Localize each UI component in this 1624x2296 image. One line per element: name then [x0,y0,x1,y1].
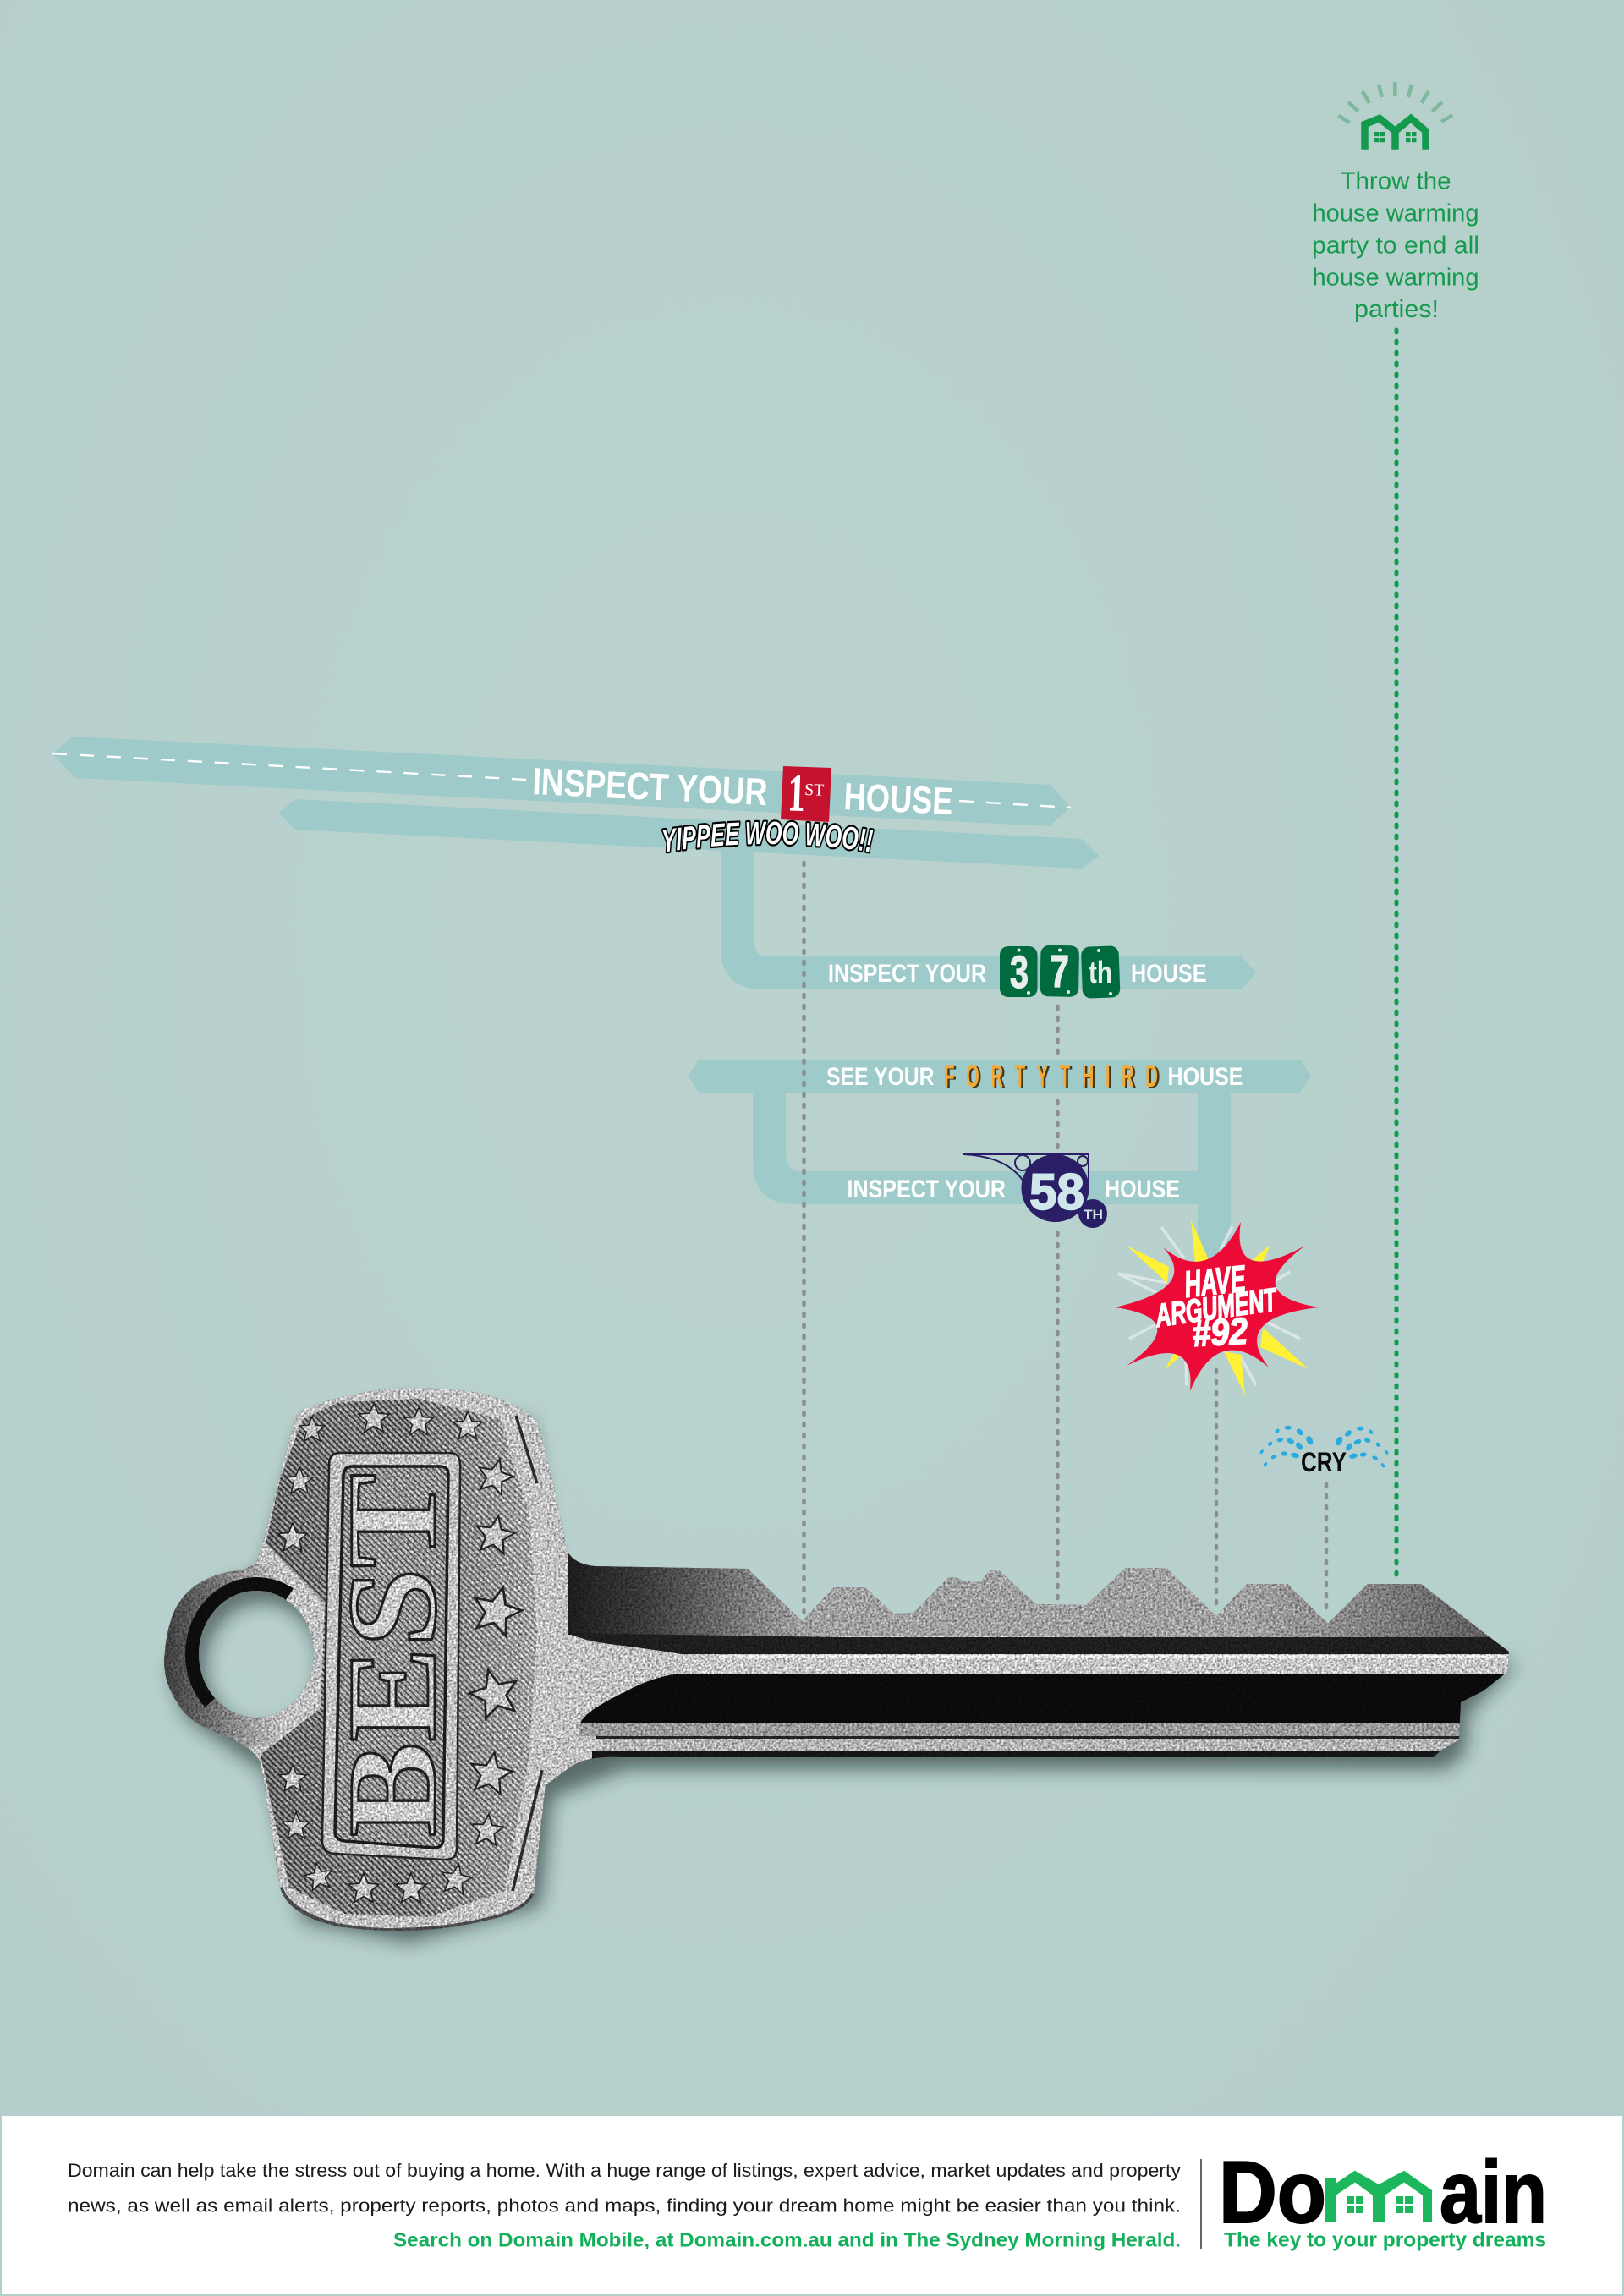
key blade dark groove [568,1633,1514,1654]
house number tiles 37th: 7 [1050,946,1069,997]
burst text [1153,1258,1281,1355]
text: house: HOUSE [1167,1063,1243,1091]
text: see your: SEE YOUR [826,1063,935,1091]
key photo [152,1378,1522,1945]
badge: navy 58th with bracket: 58 [1029,1164,1084,1220]
key blade lower stripes [579,1723,1461,1736]
text: house: HOUSE [1131,960,1206,988]
text: house: HOUSE [843,775,954,823]
badge: navy 58th with bracket: TH [1084,1207,1103,1223]
text: house warming party: parties! [1354,296,1439,323]
label: inspect your 1st house [532,759,954,823]
text: yippee woo woo: YIPPEE WOO WOO!! [661,819,875,854]
badge: red 1st: ST [804,781,825,800]
text: house warming party: party to end all [1312,232,1479,259]
cry with tears [1259,1426,1389,1477]
icon house windows [1374,132,1416,142]
badge: navy 58th with bracket [963,1154,1107,1228]
dashed white route on first road [52,753,1071,808]
key head outer edge shading [280,1888,534,1931]
text: fortythird lettering: FORTYTHIRD [944,1060,1158,1094]
key ring inner crescent [185,1577,294,1707]
text: house warming party: Throw the [1340,167,1451,195]
label: inspect your 58th house [848,1154,1180,1228]
logo: Domain: ain [1440,2144,1547,2242]
key base metal [152,1378,1522,1945]
burst white spikes [1118,1226,1300,1385]
road system: signpost bars [52,737,1311,1277]
badge: red 1st: 1 [787,764,806,823]
key head field light falloff [261,1399,537,1917]
badge: red 1st [781,764,831,823]
tears [1259,1426,1389,1468]
road: forty third house [688,1060,1311,1093]
text: fortythird lettering: FORTYTHIRD [946,1060,1160,1095]
label: inspect your 37th house [828,945,1206,999]
burst: have argument 92 [1115,1219,1319,1395]
key head rim lines [513,1416,542,1891]
logo houses [1325,2171,1432,2222]
icon: two houses with rays [1338,82,1452,150]
key stars [278,1403,526,1902]
dotted green route line [1394,330,1399,1577]
text: house warming party: house warming [1313,264,1479,291]
road: curve into 37th house [721,846,1256,989]
burst text: ARGUMENT [1153,1282,1281,1334]
label: see your forty third house [826,1060,1243,1095]
logo windows [1347,2196,1413,2213]
footer search line: Search on Domain Mobile, at Domain.com.au and in The Sydney Morning Herald. [393,2229,1181,2251]
text: inspect your: INSPECT YOUR [828,960,986,988]
key head field [261,1399,537,1917]
footer divider [1200,2159,1202,2249]
text: house warming party [1312,167,1479,323]
footer body text: Domain can help take the stress out of buying a home. With a huge range of listings, expert advice, market updates and property [68,2160,1182,2181]
key blade black channel [580,1674,1514,1723]
key shadow [171,1400,1516,1943]
logo: Domain [1219,2144,1547,2242]
key centre inset [335,1466,448,1848]
text: inspect your: INSPECT YOUR [848,1175,1006,1203]
logo: Domain: Do [1219,2144,1326,2242]
footer body text: news, as well as email alerts, property reports, photos and maps, finding your dream home might be easier than you think. [68,2195,1181,2216]
road arrow: first house [52,737,1071,826]
footer panel [2,2116,1622,2294]
text: inspect your: INSPECT YOUR [532,759,769,814]
footer background [2,2116,1622,2294]
key blade cuts [568,1548,1522,1639]
key centre plate [322,1453,460,1860]
text: cry: CRY [1301,1447,1347,1477]
text: house: HOUSE [1105,1175,1180,1203]
house number tiles 37th: th [1089,955,1112,989]
logo tagline: The key to your property dreams [1224,2229,1546,2251]
burst red star [1115,1222,1319,1391]
road arrow: second tilted road [278,799,1099,869]
key stamped letters BEST: BEST [322,1473,463,1837]
icon rays [1338,82,1452,123]
burst text: #92 [1191,1311,1249,1355]
burst yellow spikes [1127,1219,1309,1395]
road: curve into 58th house and down to argument [753,1093,1231,1277]
house number tiles 37th [1000,945,1121,999]
house number tiles 37th: 3 [1010,947,1029,998]
footer body text [68,2160,1182,2216]
icon house outline [1365,118,1426,150]
text: house warming party: house warming [1313,200,1479,227]
burst text: HAVE [1182,1258,1248,1306]
key ring shading [156,1564,283,1746]
dotted gray route lines [804,863,1326,1613]
key blade bright stripe [1506,1654,1509,1674]
